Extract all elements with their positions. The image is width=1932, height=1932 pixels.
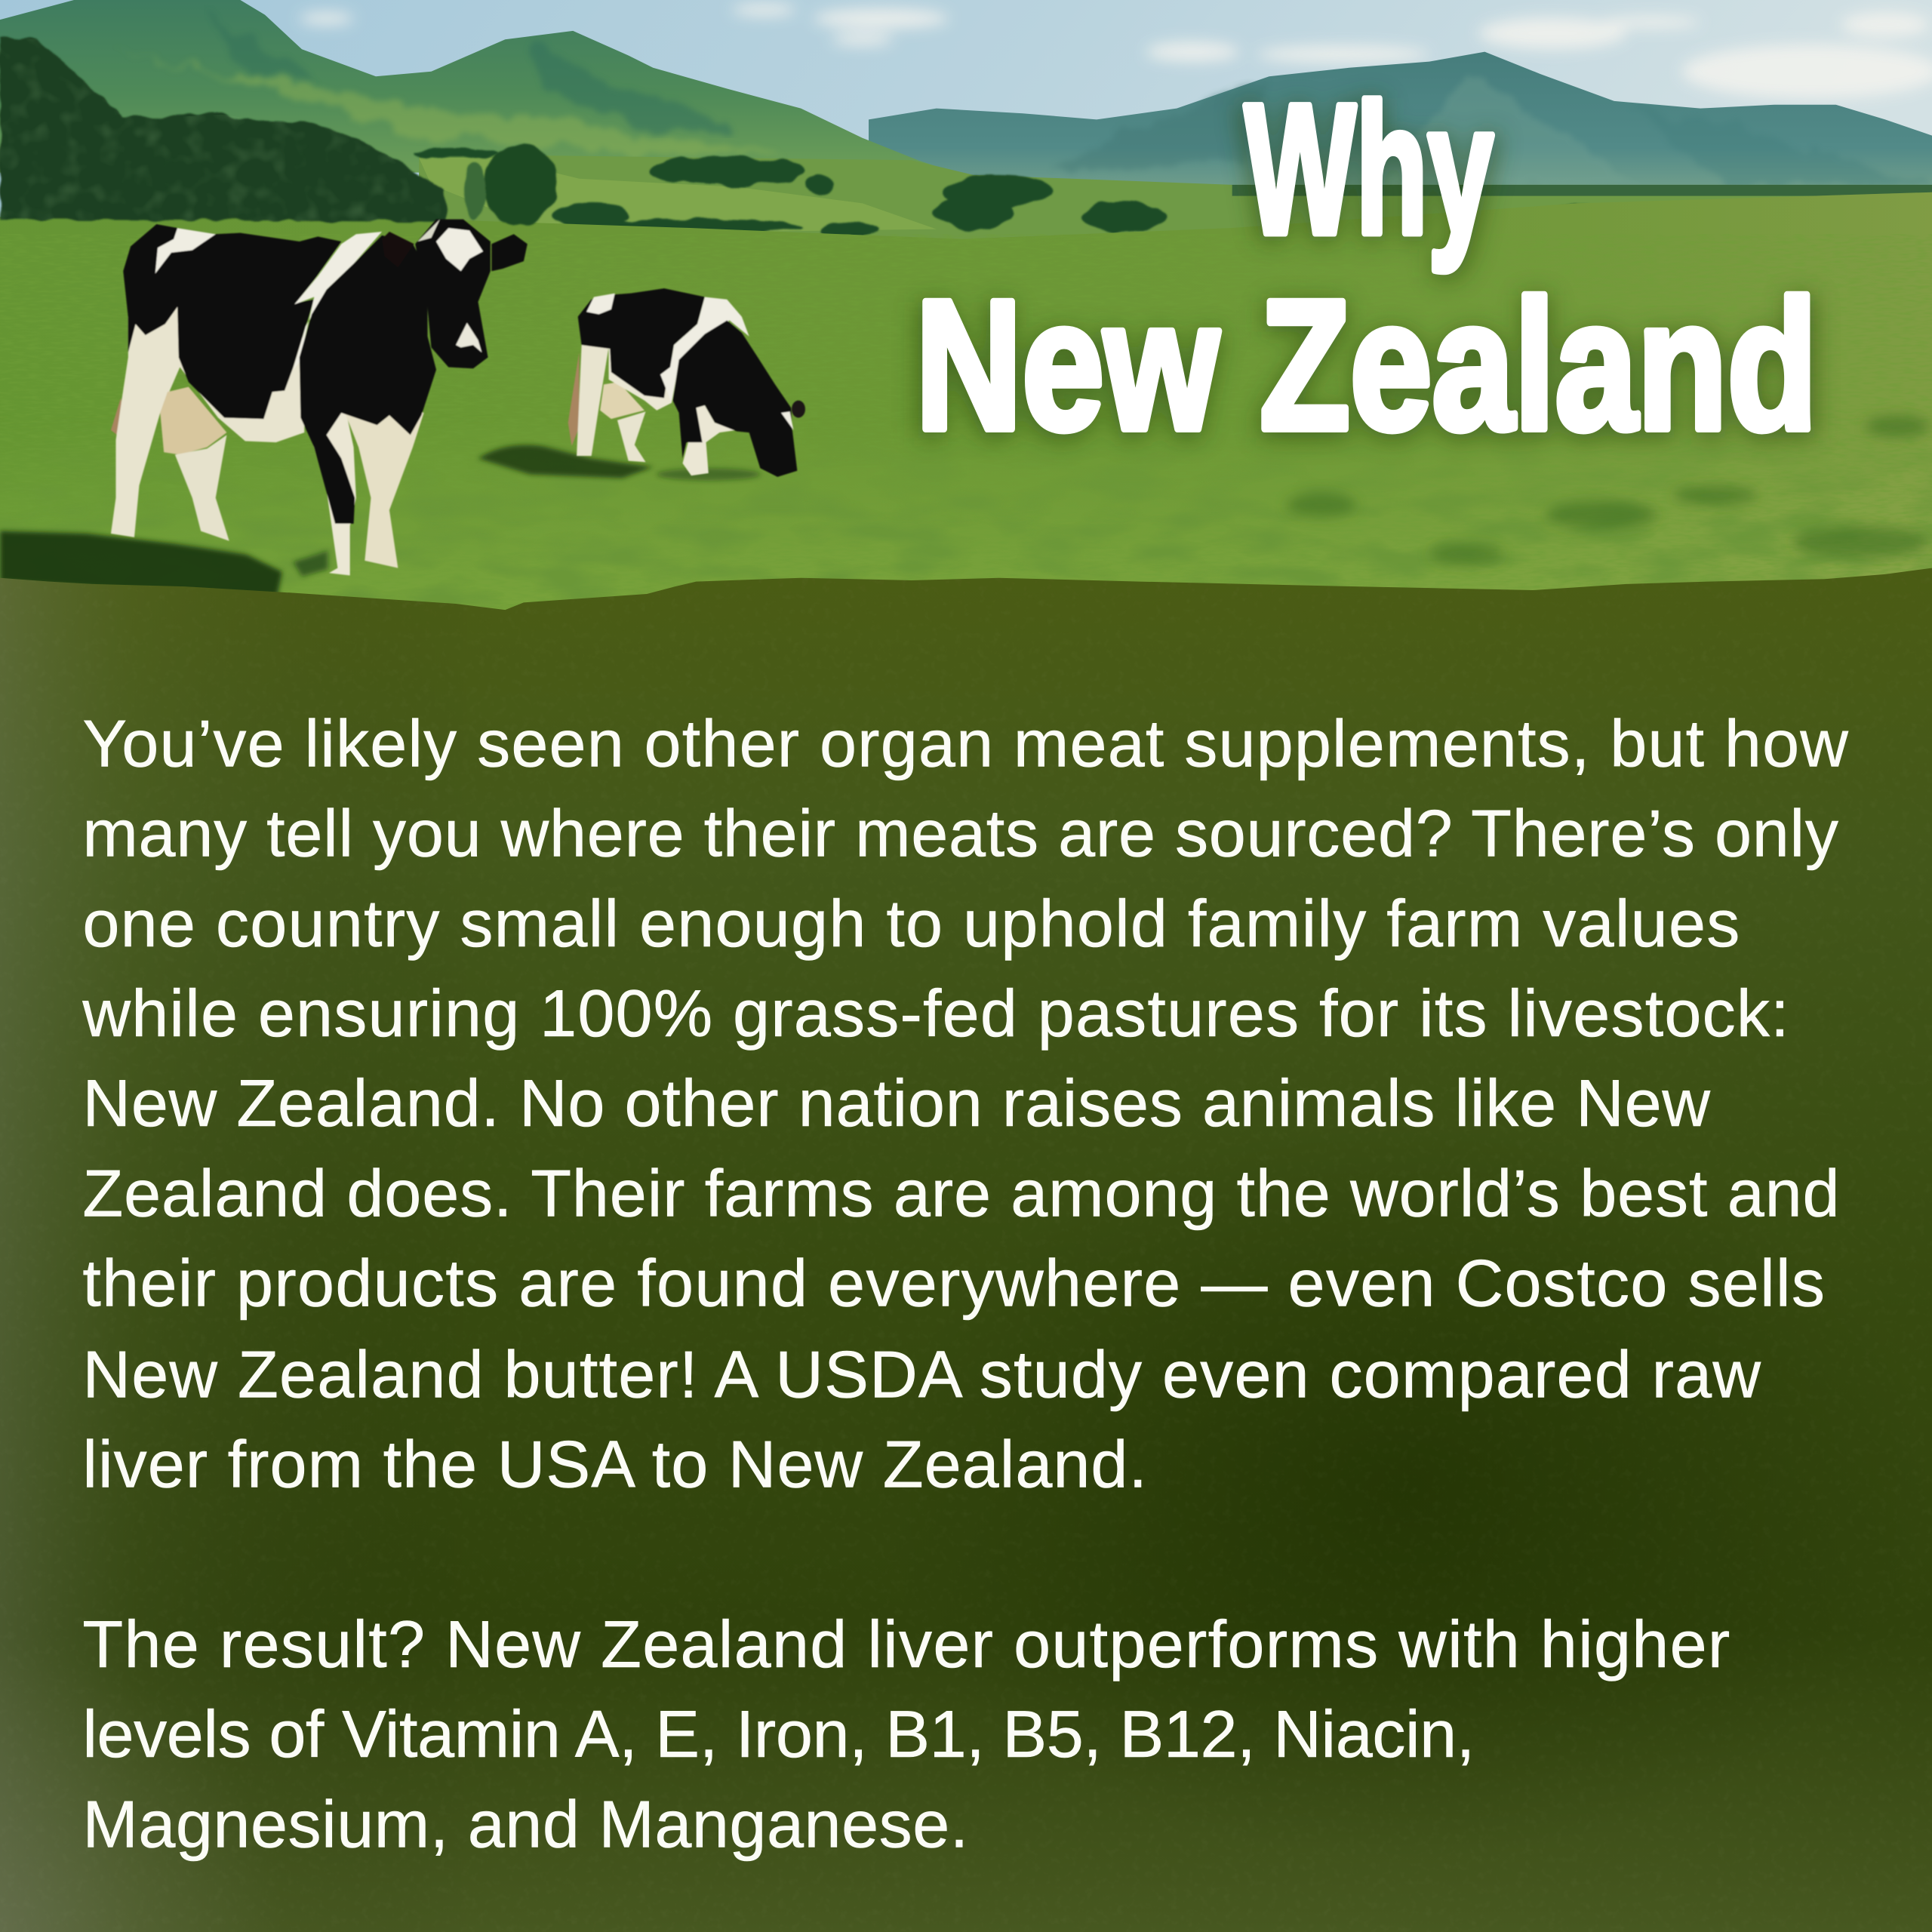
sky with clouds [0, 0, 1932, 247]
small cow hip patch [586, 294, 615, 314]
cow right ear [491, 234, 528, 271]
near mountains, left [0, 0, 955, 173]
small cow front leg [682, 405, 737, 475]
tree line, left [0, 37, 558, 224]
body paragraph: why New Zealand: Zealand does. Their farms are among the world’s best and [82, 1155, 1840, 1230]
cow rear leg and body base [111, 296, 304, 537]
title [912, 66, 1821, 473]
grass tufts [341, 459, 1932, 604]
body paragraph: why New Zealand: many tell you where their meats are sourced? There’s only [82, 796, 1838, 871]
body paragraph: the result: levels of Vitamin A, E, Iron, B1, B5, B12, Niacin, [82, 1697, 1475, 1771]
cow black hide, rear and barrel [123, 224, 341, 419]
small cow far hind leg [617, 411, 646, 462]
body paragraph: why New Zealand: while ensuring 100% grass-fed pastures for its livestock: [82, 976, 1789, 1051]
small cow udder [600, 382, 645, 419]
cow far hind leg [175, 435, 229, 541]
body paragraph: why New Zealand: their products are found everywhere — even Costco sells [82, 1246, 1825, 1321]
cow front left leg [302, 407, 356, 575]
cow head [415, 220, 491, 368]
small cow belly [609, 347, 680, 411]
large cow standing [111, 220, 528, 575]
body paragraph: why New Zealand: New Zealand butter! A USDA study even compared raw [82, 1337, 1761, 1411]
cow shadows [0, 445, 760, 596]
small cow black hide [578, 288, 705, 398]
small cow tail [568, 352, 579, 446]
cow face blaze [436, 228, 483, 271]
small cow hind leg [577, 345, 609, 456]
title: Why [1241, 69, 1497, 275]
rolling hills and distant trees [413, 148, 1932, 240]
body paragraph: why New Zealand: You’ve likely seen other organ meat supplements, but how [82, 706, 1848, 781]
dark grass clumps [1286, 415, 1930, 565]
cow udder [160, 387, 226, 454]
body paragraph: why New Zealand: liver from the USA to New Zealand. [82, 1427, 1147, 1502]
far mountain range, right [869, 52, 1932, 212]
dark green torn-edge text panel [0, 561, 1932, 1932]
cow shoulder stripe [294, 232, 382, 370]
small cow shoulder patch [660, 297, 749, 403]
title: Why [1244, 66, 1494, 272]
small cow face marking [781, 411, 793, 430]
grass field [0, 192, 1932, 641]
grass texture [0, 234, 1932, 616]
body paragraph: why New Zealand [82, 706, 1848, 1502]
body paragraph: why New Zealand: New Zealand. No other nation raises animals like New [82, 1066, 1710, 1140]
cow hip patch [155, 228, 216, 273]
cow poll marking [417, 220, 440, 242]
body paragraph: why New Zealand: one country small enough to uphold family farm values [82, 886, 1740, 961]
cow muzzle marking [456, 323, 481, 352]
body paragraph: the result [82, 1607, 1730, 1861]
body paragraph: the result: Magnesium, and Manganese. [82, 1786, 968, 1861]
small cow grazing [568, 288, 805, 477]
small cow ear [792, 401, 805, 417]
cow black hide, neck and foreleg [300, 235, 436, 524]
cow tail [111, 398, 125, 435]
cow front right leg [343, 401, 424, 568]
cow left ear [382, 232, 414, 267]
landscape photo scene [0, 0, 1932, 641]
small cow neck and head [672, 320, 797, 477]
body paragraph: the result: The result? New Zealand liver outperforms with higher [82, 1607, 1730, 1681]
